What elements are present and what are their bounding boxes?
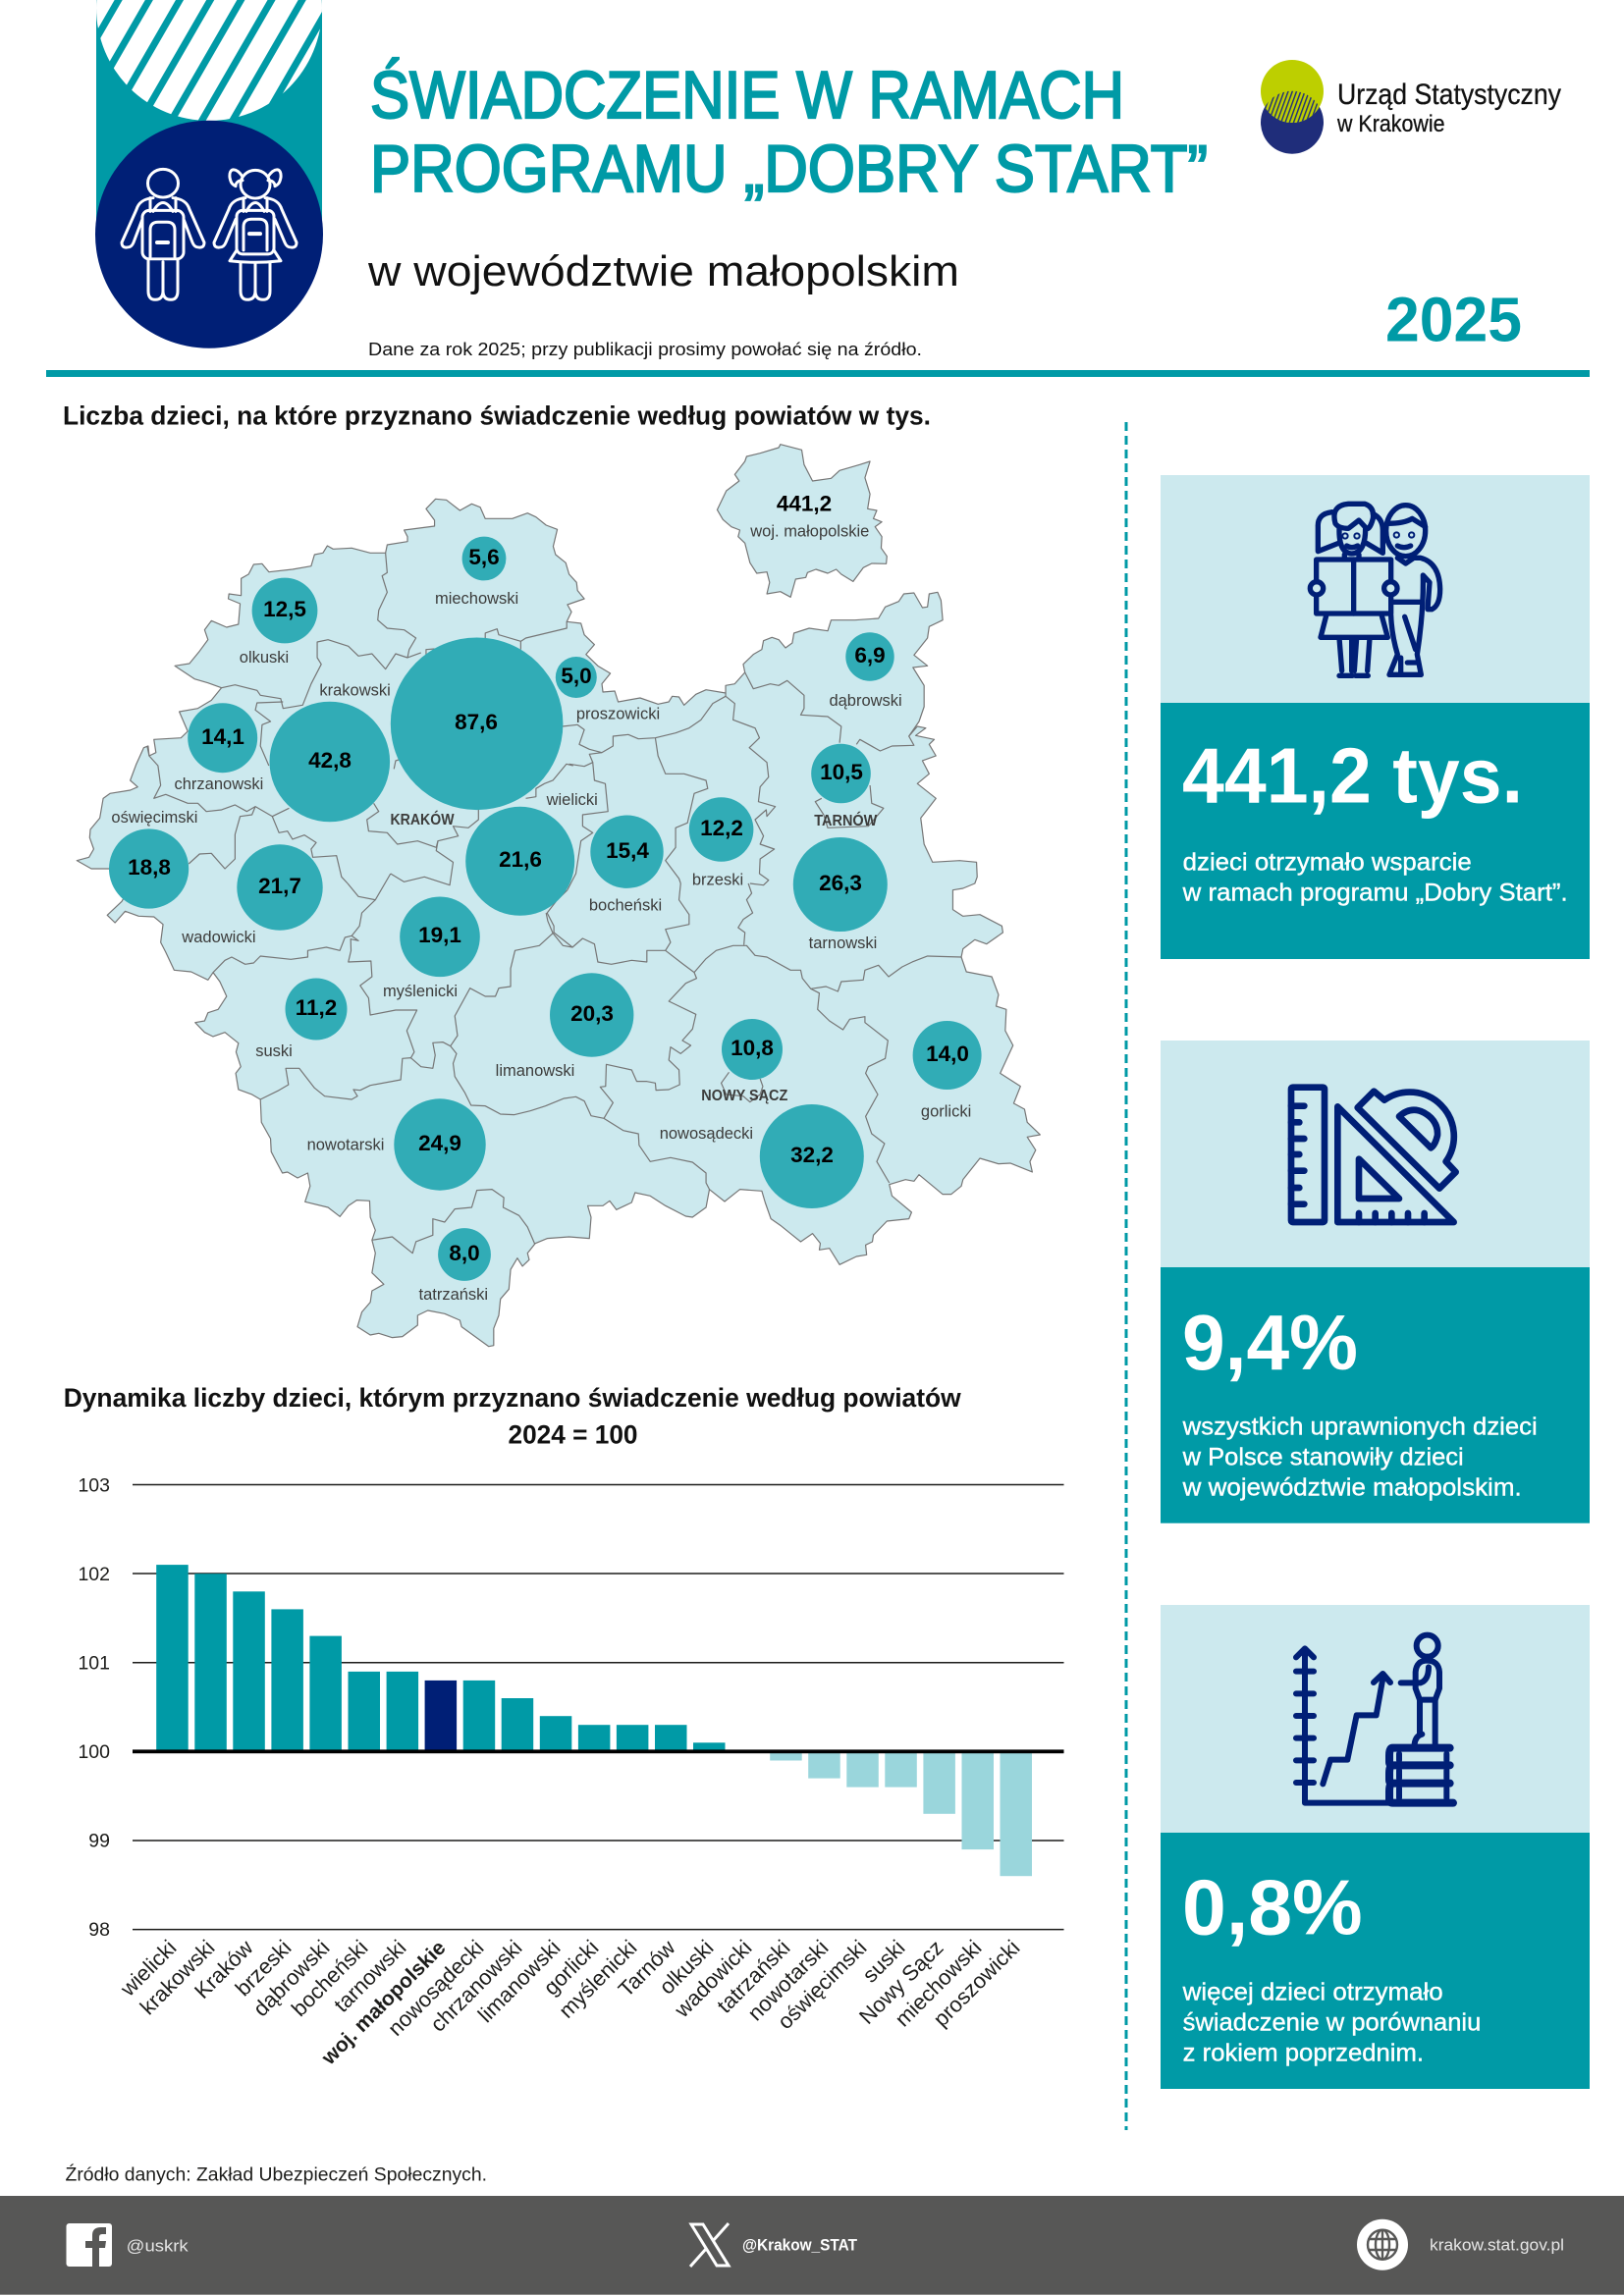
heading: map: Liczba dzieci, na które przyznano świadczenie według powiatów w tys. — [63, 400, 931, 430]
x axis labels: nowosądecki — [383, 1935, 489, 2041]
x axis labels: krakowski — [135, 1935, 220, 2019]
icon: globe — [1357, 2219, 1408, 2270]
big number: 9,4% — [1182, 1299, 1358, 1386]
data note: Dane za rok 2025; przy publikacji prosimy powołać się na źródło. — [368, 340, 922, 359]
description — [1182, 849, 1568, 907]
x axis labels: bocheński — [287, 1935, 373, 2021]
x axis labels: brzeski — [231, 1935, 297, 2001]
x axis labels: olkuski — [654, 1935, 719, 2000]
circle values: 11,2 — [296, 995, 337, 1020]
circle values: 8,0 — [449, 1241, 480, 1265]
powiat labels: chrzanowski — [175, 775, 263, 793]
description — [1182, 1979, 1481, 2066]
x axis labels: nowotarski — [743, 1935, 834, 2025]
circle values: 5,0 — [561, 664, 592, 688]
logo: Urząd Statystyczny w Krakowie: Urząd Statystyczny — [1337, 79, 1561, 111]
heading: bar chart: 2024 = 100 — [509, 1420, 638, 1450]
x axis labels: Nowy Sącz — [854, 1935, 948, 2029]
year: 2025 — [1385, 284, 1522, 354]
gridlines and y axis: 102 — [78, 1564, 110, 1585]
x axis labels: chrzanowski — [425, 1935, 527, 2037]
circle values: 12,2 — [700, 816, 743, 840]
description: w województwie małopolskim. — [1182, 1473, 1522, 1501]
x axis labels: myślenicki — [554, 1935, 642, 2023]
circle values: 26,3 — [819, 871, 862, 895]
facebook handle: @uskrk — [127, 2236, 189, 2255]
circle values: 19,1 — [418, 923, 461, 947]
circle values: 42,8 — [308, 748, 352, 773]
circle values: 6,9 — [854, 643, 886, 667]
logo: Urząd Statystyczny w Krakowie: w Krakowie — [1336, 111, 1445, 137]
website: krakow.stat.gov.pl — [1430, 2236, 1564, 2254]
x axis labels: Kraków — [189, 1935, 258, 2003]
heading: bar chart: Dynamika liczby dzieci, którym przyznano świadczenie według powiatów — [64, 1383, 962, 1413]
description — [1182, 1414, 1538, 1501]
powiat labels: tatrzański — [418, 1286, 488, 1304]
icon: facebook — [67, 2223, 112, 2267]
powiat labels: limanowski — [496, 1062, 574, 1080]
x axis labels: limanowski — [473, 1935, 566, 2027]
title — [370, 57, 1208, 206]
circle values: 32,2 — [790, 1143, 834, 1167]
x axis labels: wielicki — [115, 1935, 182, 2002]
powiat labels: krakowski — [319, 681, 391, 699]
powiat labels: NOWY SĄCZ — [701, 1088, 788, 1104]
gridlines and y axis — [78, 1474, 1064, 1941]
description: z rokiem poprzednim. — [1183, 2039, 1424, 2066]
x axis labels: suski — [857, 1935, 910, 1987]
bar chart: dynamics 2024 = 100 — [78, 1474, 1064, 2070]
description: więcej dzieci otrzymało — [1182, 1979, 1443, 2006]
big number: 441,2 tys. — [1182, 732, 1523, 820]
panel: 441,2 tys. — [1161, 475, 1590, 959]
province outlines — [77, 445, 1040, 1347]
x axis labels: tatrzański — [712, 1935, 795, 2018]
x axis labels: wadowicki — [669, 1935, 757, 2023]
powiat labels: TARNÓW — [814, 811, 878, 829]
description: dzieci otrzymało wsparcie — [1183, 849, 1472, 877]
description: świadczenie w porównaniu — [1183, 2008, 1481, 2036]
powiat labels: KRAKÓW — [391, 810, 455, 828]
icon: ruler, set square and protractor — [1291, 1088, 1456, 1222]
x axis labels: tarnowski — [329, 1935, 411, 2017]
header emblem: children with backpacks — [95, 0, 323, 348]
powiat labels — [111, 523, 971, 1304]
icon: girl with backpack — [214, 170, 297, 299]
powiat labels: nowosądecki — [660, 1125, 753, 1143]
gridlines and y axis: 99 — [88, 1830, 110, 1851]
circle values: 18,8 — [128, 855, 171, 880]
logo: Urząd Statystyczny w Krakowie — [1261, 60, 1561, 154]
circle values: 12,5 — [263, 597, 306, 621]
title: ŚWIADCZENIE W RAMACH — [370, 57, 1124, 133]
circle values: 87,6 — [455, 710, 498, 734]
description: wszystkich uprawnionych dzieci — [1182, 1414, 1538, 1441]
powiat labels: tarnowski — [809, 934, 877, 952]
powiat labels: woj. małopolskie — [749, 523, 869, 541]
icon: growth chart and figure on books — [1296, 1635, 1453, 1803]
x axis labels: Tarnów — [614, 1935, 680, 2002]
gridlines and y axis: 98 — [88, 1919, 110, 1941]
big number: 0,8% — [1182, 1864, 1363, 1951]
proportional circles — [109, 537, 982, 1281]
description: w Polsce stanowiły dzieci — [1182, 1444, 1464, 1471]
circle values: 20,3 — [570, 1001, 614, 1026]
panel: 9,4% — [1161, 1041, 1590, 1523]
x axis labels: proszowicki — [928, 1935, 1025, 2031]
gridlines and y axis: 100 — [78, 1741, 110, 1763]
gridlines and y axis: 103 — [78, 1474, 110, 1496]
source note: Źródło danych: Zakład Ubezpieczeń Społecznych. — [65, 2165, 487, 2186]
icon: boy with backpack — [122, 169, 204, 299]
powiat labels: proszowicki — [576, 705, 660, 722]
circle values: 21,7 — [258, 874, 301, 898]
X handle: @Krakow_STAT — [742, 2236, 858, 2254]
powiat labels: gorlicki — [921, 1103, 971, 1121]
x axis labels: oświęcimski — [773, 1935, 872, 2034]
circle values: 21,6 — [499, 847, 542, 872]
circle values: 10,8 — [731, 1036, 774, 1060]
circle values: 15,4 — [606, 838, 649, 863]
icon: children reading a book — [1310, 504, 1440, 675]
title: PROGRAMU „DOBRY START” — [370, 132, 1208, 206]
subtitle: w województwie małopolskim — [367, 247, 959, 295]
bars — [156, 1565, 1032, 1876]
circle values: 24,9 — [418, 1131, 461, 1155]
powiat labels: olkuski — [240, 649, 289, 667]
gridlines and y axis: 101 — [78, 1653, 110, 1675]
heading: bar chart — [64, 1383, 962, 1450]
circle values: 14,0 — [926, 1041, 969, 1066]
circle values: 441,2 — [777, 492, 832, 516]
x axis labels: dąbrowski — [248, 1935, 335, 2021]
circle values — [128, 492, 969, 1265]
x axis labels: miechowski — [890, 1935, 987, 2031]
powiat labels: miechowski — [435, 590, 518, 608]
powiat labels: nowotarski — [307, 1137, 384, 1154]
powiat labels: wadowicki — [181, 929, 256, 946]
x axis labels — [115, 1935, 1025, 2070]
powiat labels: oświęcimski — [111, 809, 197, 827]
icon: X — [690, 2223, 729, 2267]
circle values: 14,1 — [201, 724, 244, 749]
circle values: 10,5 — [820, 760, 863, 784]
map: powiaty of Małopolska — [77, 445, 1040, 1347]
powiat labels: suski — [255, 1042, 293, 1060]
description: w ramach programu „Dobry Start”. — [1182, 880, 1568, 907]
footer — [0, 2196, 1624, 2295]
powiat labels: brzeski — [692, 872, 743, 889]
powiat labels: dąbrowski — [829, 692, 902, 710]
powiat labels: wielicki — [546, 791, 598, 809]
panel: 0,8% — [1161, 1605, 1590, 2089]
powiat labels: myślenicki — [383, 983, 458, 1000]
circle values: 5,6 — [468, 545, 500, 569]
powiat labels: bocheński — [589, 897, 662, 915]
inset: whole voivodeship — [717, 445, 887, 597]
x axis labels: gorlicki — [538, 1935, 604, 2000]
x axis labels: woj. małopolskie — [317, 1937, 451, 2070]
